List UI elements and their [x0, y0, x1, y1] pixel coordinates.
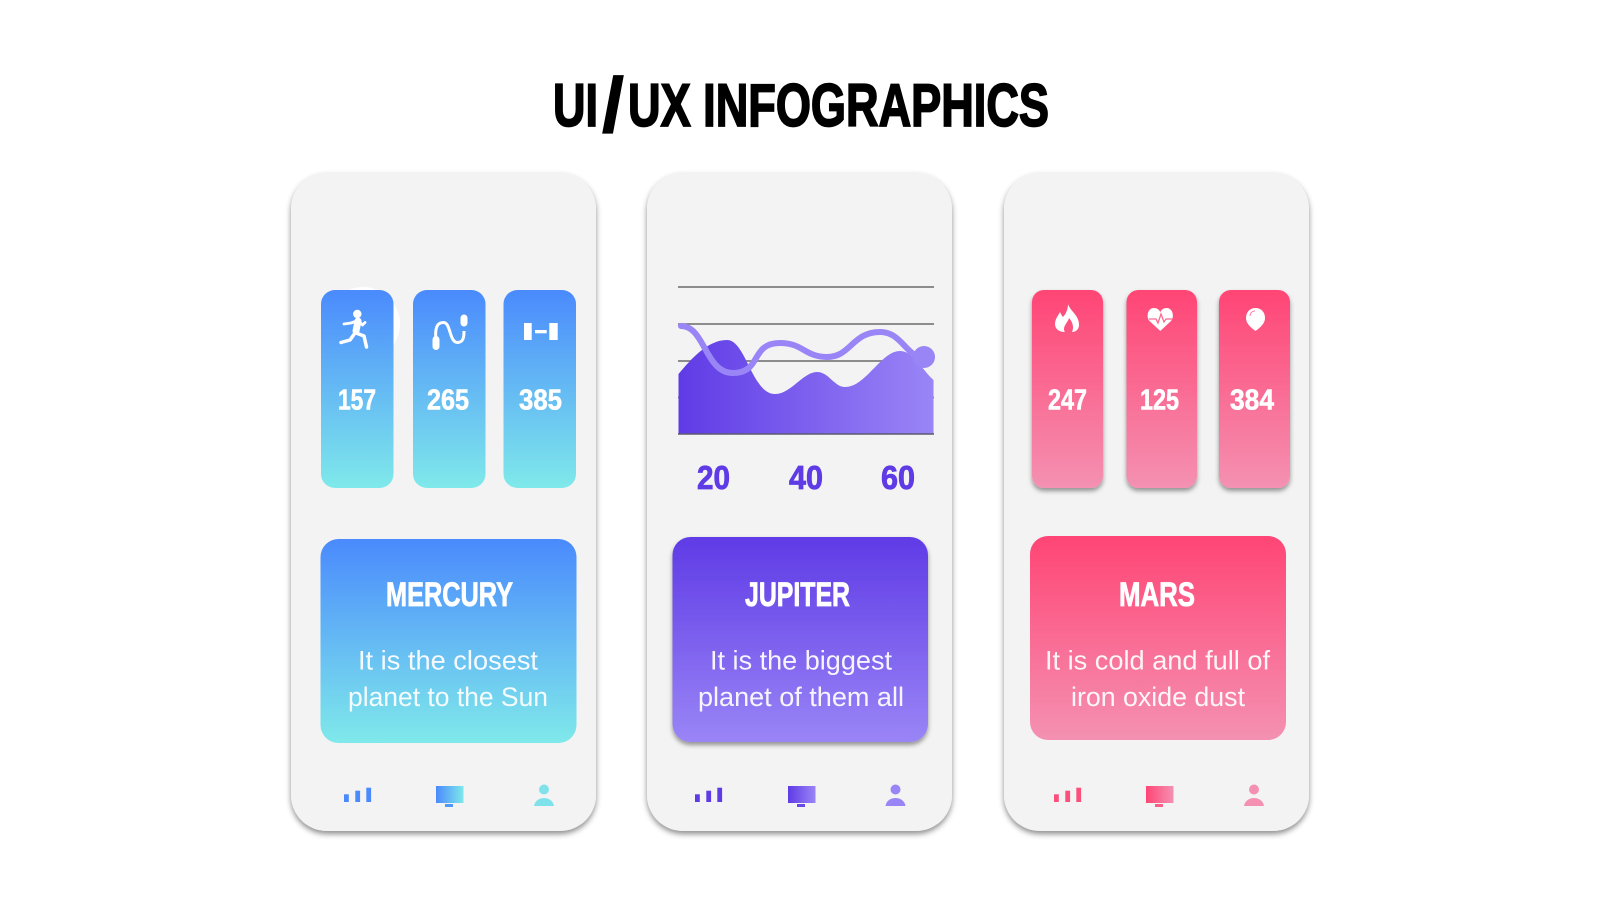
- icon: person: [886, 784, 906, 806]
- info card: mars: [1030, 536, 1286, 740]
- phone body: [1004, 173, 1309, 831]
- line end marker: [913, 346, 935, 368]
- description: It is cold and full of: [1045, 646, 1270, 676]
- phone body: [291, 173, 596, 831]
- value: 157: [338, 384, 376, 416]
- value: 247: [1048, 384, 1087, 416]
- title: /: [602, 63, 624, 148]
- axis labels: [697, 459, 915, 496]
- value: 125: [1140, 384, 1179, 416]
- axis labels: 60: [881, 459, 915, 496]
- heading: MARS: [1119, 576, 1195, 614]
- stat card: balloon 384: [1219, 290, 1290, 488]
- axis labels: 20: [697, 459, 730, 496]
- heading: MERCURY: [386, 576, 513, 614]
- icon: barbell: [524, 323, 558, 340]
- description: [348, 646, 548, 712]
- stat card: barbell 385: [504, 290, 576, 488]
- description: iron oxide dust: [1071, 682, 1245, 712]
- stat card: heart rate 125: [1126, 290, 1197, 488]
- panel: jupiter phone: [647, 173, 952, 831]
- icon: signal bars: [695, 788, 722, 802]
- icon: signal bars: [1054, 788, 1081, 802]
- nav bar: [695, 784, 906, 807]
- nav bar: [1054, 784, 1264, 807]
- icon: signal bars: [344, 788, 371, 802]
- value: 385: [519, 384, 562, 416]
- title: UX INFOGRAPHICS: [628, 72, 1049, 139]
- stat card: flame 247: [1032, 290, 1103, 488]
- description: It is the closest: [358, 646, 538, 676]
- white highlight circle: [326, 287, 400, 361]
- icon: jump rope: [432, 314, 468, 350]
- icon: monitor: [1146, 786, 1174, 807]
- description: [698, 646, 904, 712]
- area chart with line: [678, 287, 935, 434]
- title: UI: [553, 72, 598, 139]
- info card: jupiter: [672, 537, 928, 742]
- value: 384: [1230, 384, 1274, 416]
- panel: mars phone: [1004, 173, 1309, 831]
- icon: runner: [341, 310, 366, 347]
- icon: person: [534, 784, 554, 806]
- icon: heart: [1148, 308, 1173, 331]
- panel: mercury phone: [291, 173, 596, 831]
- icon: flame: [1055, 304, 1079, 332]
- info card: mercury: [320, 539, 576, 743]
- phone body: [647, 173, 952, 831]
- description: planet of them all: [698, 682, 904, 712]
- stat card: jump rope 265: [413, 290, 486, 488]
- icon: monitor: [436, 786, 464, 807]
- description: [1045, 646, 1270, 712]
- nav bar: [344, 784, 554, 807]
- description: planet to the Sun: [348, 682, 548, 712]
- icon: person: [1244, 784, 1264, 806]
- heading: JUPITER: [745, 576, 850, 614]
- icon: balloon: [1246, 308, 1265, 331]
- line series: [681, 326, 923, 373]
- axis labels: 40: [789, 459, 823, 496]
- icon: monitor: [788, 786, 816, 807]
- title: [553, 63, 1049, 148]
- area series: [678, 340, 934, 434]
- stat card: running 157: [321, 290, 394, 488]
- description: It is the biggest: [710, 646, 892, 676]
- value: 265: [427, 384, 469, 416]
